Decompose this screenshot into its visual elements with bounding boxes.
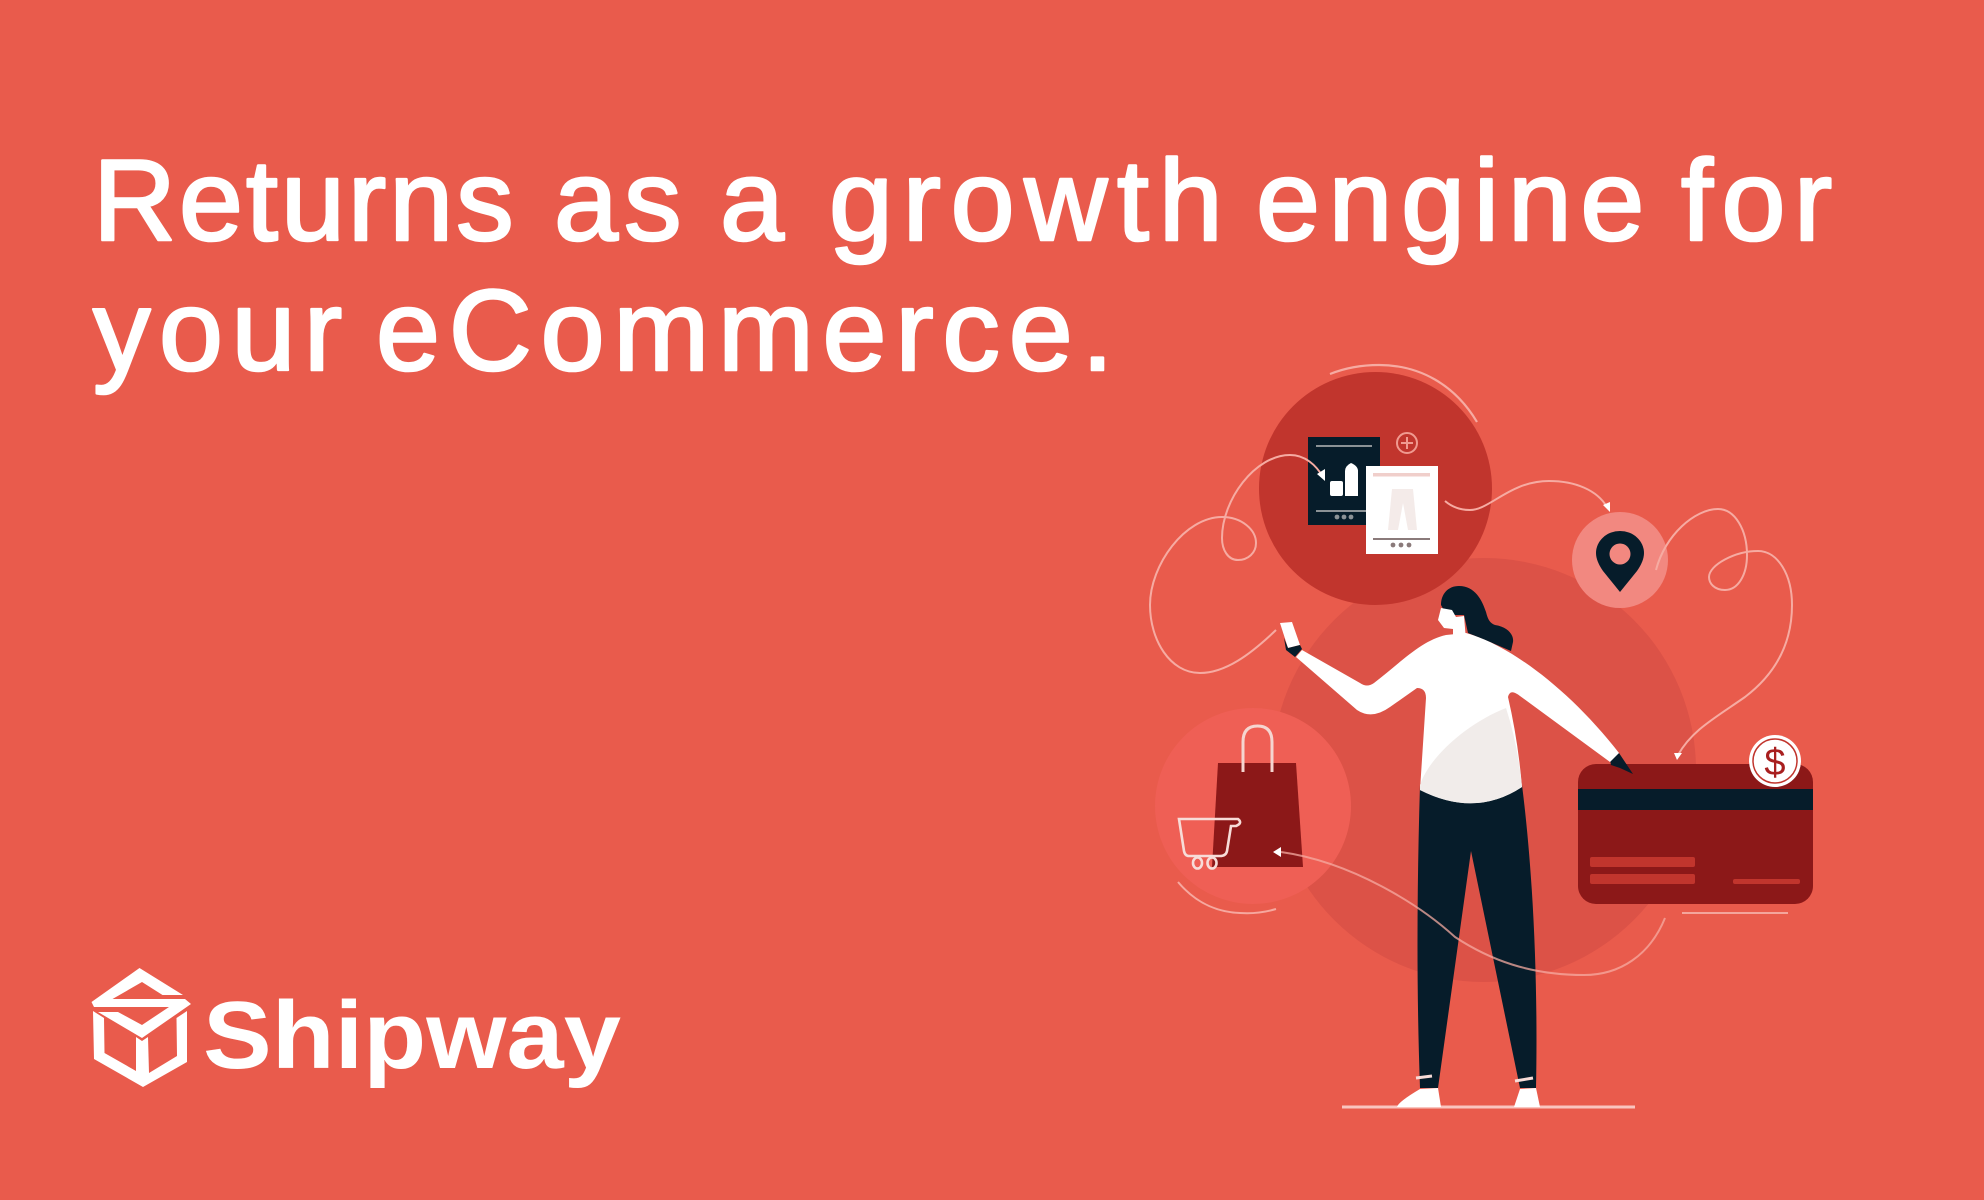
right hand bbox=[1610, 753, 1633, 774]
left hand and cuff bbox=[1284, 638, 1302, 657]
line under card bbox=[1682, 912, 1788, 914]
icon: location pin bbox=[1596, 531, 1644, 592]
left shoe bbox=[1397, 1088, 1441, 1107]
connector line: to credit card bbox=[1656, 509, 1792, 755]
title: growth bbox=[829, 137, 1232, 265]
legs bbox=[1418, 785, 1536, 1088]
shopping bag bbox=[1212, 726, 1303, 867]
hair bbox=[1441, 586, 1513, 651]
woman figure bbox=[1280, 586, 1633, 1107]
credit card bbox=[1578, 764, 1813, 904]
title: engine bbox=[1256, 137, 1653, 265]
product circle bbox=[1259, 372, 1492, 605]
shopping circle bbox=[1155, 708, 1351, 904]
logo: Shipway bbox=[92, 968, 621, 1089]
icon: box lid bbox=[92, 968, 191, 1038]
background circle bbox=[1272, 558, 1696, 982]
location circle bbox=[1572, 512, 1668, 608]
product card: dark bbox=[1308, 437, 1380, 525]
icon: plus circle bbox=[1397, 433, 1417, 453]
icon: dollar coin bbox=[1749, 735, 1801, 787]
illustration: woman with eCommerce icons bbox=[1150, 365, 1813, 1108]
connector line: left loop bbox=[1150, 455, 1323, 673]
product card: white with trousers bbox=[1366, 466, 1438, 554]
right shoe bbox=[1514, 1088, 1540, 1107]
connector line: to shopping bag bbox=[1281, 852, 1665, 975]
shaded belly bbox=[1420, 708, 1522, 803]
ankle marks bbox=[1416, 1076, 1533, 1081]
face and neck bbox=[1438, 608, 1466, 640]
ground line bbox=[1342, 1106, 1635, 1108]
arc under shopping circle bbox=[1178, 882, 1276, 913]
icon: box body bbox=[93, 1011, 187, 1087]
arrowheads bbox=[1273, 469, 1682, 857]
title: for bbox=[1681, 137, 1841, 265]
icon: dollar coin: $ bbox=[1764, 742, 1786, 784]
connector line: to location pin bbox=[1445, 481, 1607, 510]
connector line: top arc bbox=[1330, 365, 1477, 422]
icon: shopping cart bbox=[1179, 819, 1240, 868]
title: your bbox=[93, 267, 351, 395]
phone bbox=[1280, 622, 1300, 648]
title: a bbox=[720, 137, 784, 265]
title: as bbox=[554, 137, 687, 265]
title: eCommerce. bbox=[376, 267, 1122, 395]
title: Returns bbox=[93, 137, 517, 265]
title bbox=[93, 137, 1841, 395]
white top and arms bbox=[1296, 633, 1619, 803]
logo wordmark: Shipway bbox=[203, 982, 621, 1089]
